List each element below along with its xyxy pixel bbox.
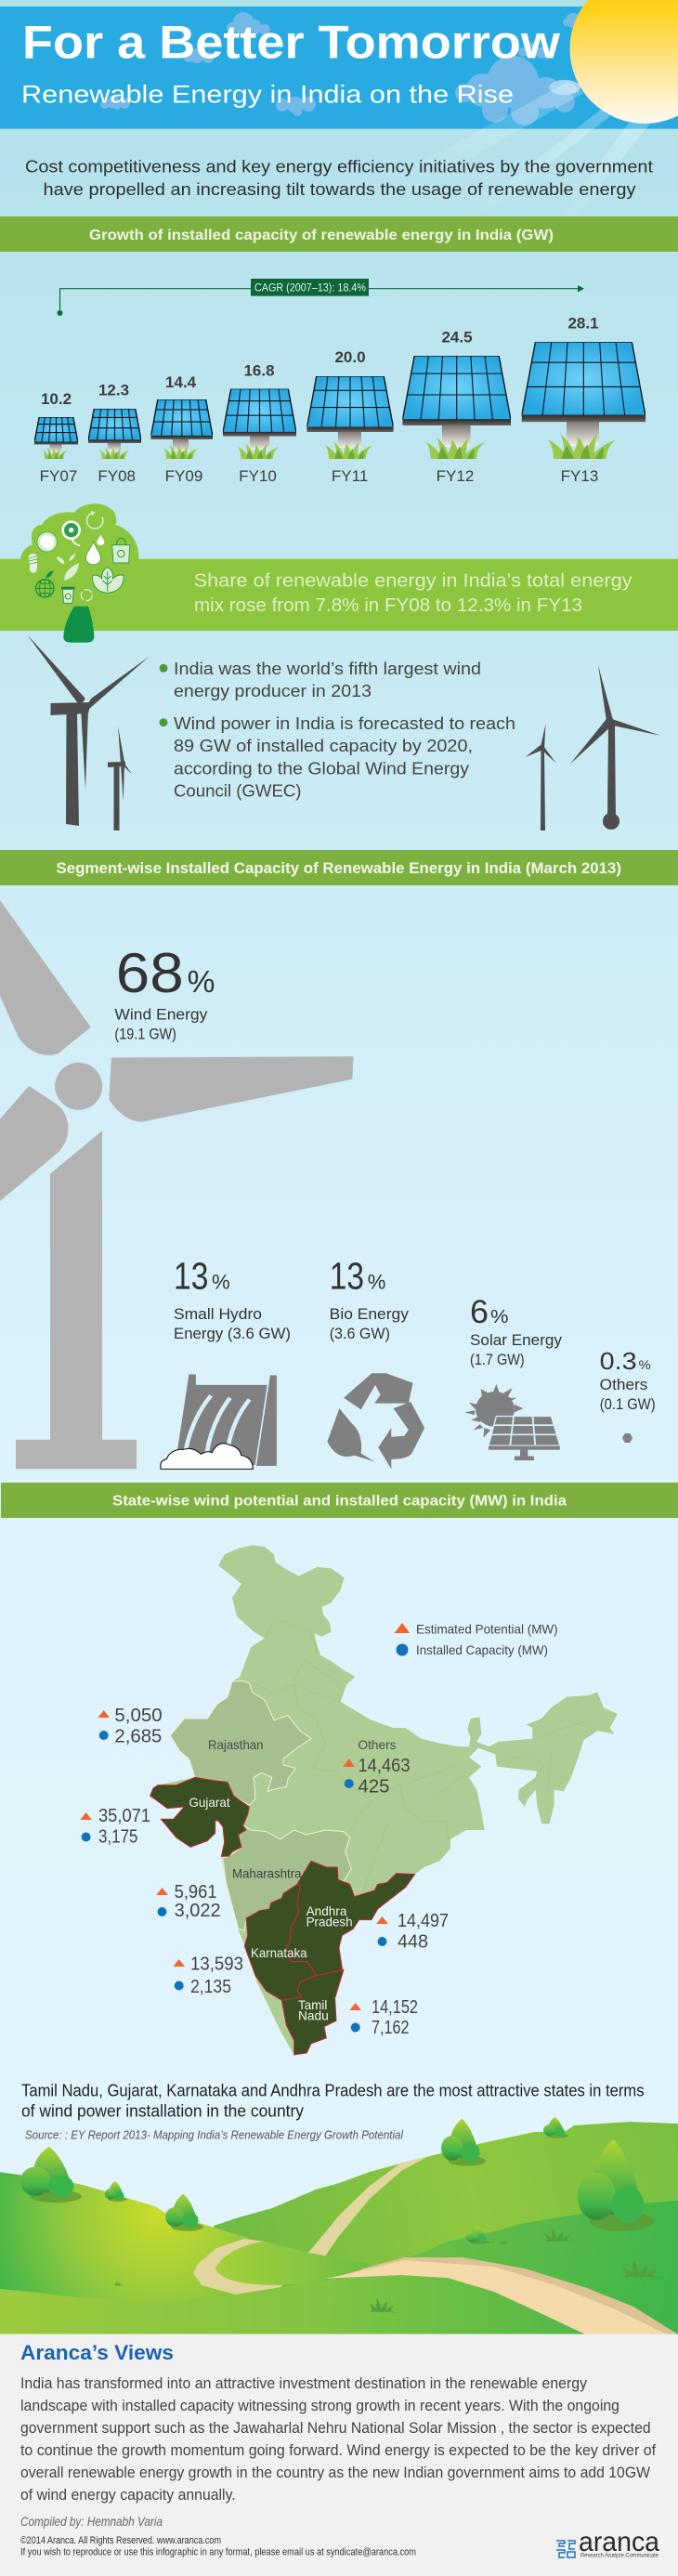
copyright: ©2014 Aranca. All Rights Reserved. www.aranca.com xyxy=(20,2535,221,2546)
FY10: FY10 xyxy=(239,467,277,485)
header banner xyxy=(0,0,678,216)
Others values: 425 xyxy=(359,1776,390,1797)
views body: India has transformed into an attractive investment destination in the renewable energy xyxy=(20,2375,588,2392)
icon: others dot xyxy=(622,1433,632,1443)
CAGR arrow xyxy=(58,279,584,316)
views body: of wind energy capacity annually. xyxy=(20,2487,236,2504)
Gujarat values: 3,175 xyxy=(98,1827,137,1848)
copyright: If you wish to reproduce or use this infographic in any format, please email us at syndicate@aranca.com xyxy=(20,2546,416,2557)
bushes xyxy=(20,2117,654,2244)
icon: solar panel and sun xyxy=(464,1384,560,1460)
Andhra Pradesh values: 14,497 xyxy=(398,1911,449,1931)
intro text: Cost competitiveness and key energy efficiency initiatives by the government xyxy=(25,158,653,177)
FY07: FY07 xyxy=(40,467,77,485)
section bar: state-wise wind: State-wise wind potential and installed capacity (MW) in India xyxy=(112,1493,567,1509)
wind facts: Wind power in India is forecasted to reach xyxy=(174,713,515,733)
wind facts: India was the world’s fifth largest wind xyxy=(174,659,481,678)
stat: bio energy xyxy=(330,1255,409,1342)
views body xyxy=(20,2375,656,2504)
FY11: FY11 xyxy=(332,467,368,485)
section bar: growth of capacity: Growth of installed capacity of renewable energy in India (GW) xyxy=(89,228,554,243)
views heading: Aranca’s Views xyxy=(20,2341,174,2364)
stat: small hydro xyxy=(174,1255,291,1342)
Tamil Nadu values: 7,162 xyxy=(372,2018,409,2038)
share banner: mix rose from 7.8% in FY08 to 12.3% in FY13 xyxy=(194,595,582,616)
stat: solar energy: Solar Energy xyxy=(470,1331,562,1349)
icon: green energy tree xyxy=(20,503,138,643)
stat: others: 0.3 xyxy=(600,1347,637,1375)
clouds xyxy=(100,12,580,125)
section bar: growth of capacity xyxy=(0,216,678,252)
Andhra Pradesh values: 448 xyxy=(398,1932,428,1953)
stat: wind energy: Wind Energy xyxy=(114,1005,208,1023)
stat: small hydro: Energy (3.6 GW) xyxy=(174,1325,291,1342)
Karnataka values: 2,135 xyxy=(190,1977,231,1997)
map: Rajasthan xyxy=(170,1680,311,1805)
compiled by: Compiled by: Hemnabh Varia xyxy=(20,2514,163,2529)
landscape illustration xyxy=(0,2117,678,2334)
stat: others: Others xyxy=(600,1376,647,1393)
copyright xyxy=(20,2535,416,2557)
stat: small hydro: 13 xyxy=(174,1255,208,1298)
Rajasthan values xyxy=(98,1706,163,1746)
stat: bio energy: Bio Energy xyxy=(330,1305,409,1323)
stat: others: % xyxy=(639,1357,651,1372)
map legend: Installed Capacity (MW) xyxy=(416,1642,548,1657)
map takeaway text xyxy=(21,2082,645,2120)
section bar: segment-wise capacity xyxy=(0,850,678,885)
map: Andhra Pradesh xyxy=(286,1861,415,1976)
Aranca's views panel xyxy=(0,2334,678,2576)
Others values xyxy=(343,1756,411,1797)
wind facts: according to the Global Wind Energy xyxy=(174,758,470,778)
stat: solar energy: 6 xyxy=(470,1294,489,1330)
map state labels: Maharashtra xyxy=(232,1866,302,1881)
stat: others: (0.1 GW) xyxy=(600,1395,656,1413)
map of India xyxy=(150,1545,618,2055)
FY08: FY08 xyxy=(98,467,136,485)
map: Maharashtra xyxy=(223,1825,351,1930)
aranca logo: aranca xyxy=(579,2527,659,2557)
map: Karnataka xyxy=(244,1884,316,2000)
Gujarat values xyxy=(80,1806,150,1848)
map: Gujarat xyxy=(150,1777,249,1856)
upper road xyxy=(308,2157,427,2256)
icon: hydro dam xyxy=(161,1374,277,1469)
map state labels xyxy=(189,1737,396,2023)
intro text: have propelled an increasing tilt towards the usage of renewable energy xyxy=(43,180,635,199)
Rajasthan values: 2,685 xyxy=(114,1726,162,1746)
icon: recycle leaf xyxy=(327,1373,424,1469)
wind turbines right xyxy=(526,665,660,830)
Tamil Nadu values xyxy=(349,1997,418,2038)
stat: solar energy: % xyxy=(490,1307,509,1327)
FY08 xyxy=(88,382,141,485)
wind turbines left xyxy=(27,634,150,830)
FY07 xyxy=(34,390,78,485)
Andhra Pradesh values xyxy=(376,1911,449,1953)
Others values: 14,463 xyxy=(359,1756,411,1776)
sun rays xyxy=(409,81,650,216)
FY09 xyxy=(150,373,213,485)
tree icons xyxy=(29,511,130,603)
map: India outline xyxy=(150,1545,618,2055)
stat: bio energy: 13 xyxy=(330,1255,364,1298)
small turbine xyxy=(108,726,132,830)
bullet xyxy=(160,664,167,673)
FY10 xyxy=(223,362,296,485)
map takeaway text: Tamil Nadu, Gujarat, Karnataka and Andhra Pradesh are the most attractive states in terms xyxy=(21,2082,645,2100)
views body: government support such as the Jawaharlal Nehru National Solar Mission , the sector is expected xyxy=(20,2420,651,2437)
big turbine xyxy=(27,634,150,826)
stat: small hydro: % xyxy=(212,1271,230,1294)
sun xyxy=(570,0,678,124)
Rajasthan values: 5,050 xyxy=(114,1706,163,1726)
source note: Source: : EY Report 2013- Mapping India’s Renewable Energy Growth Potential xyxy=(25,2128,404,2142)
wind facts: 89 GW of installed capacity by 2020, xyxy=(174,736,473,755)
map state labels: Others xyxy=(359,1737,396,1752)
map legend xyxy=(395,1621,558,1657)
aranca logo: Research.Analyze.Communicate xyxy=(580,2553,658,2558)
share banner xyxy=(0,559,678,631)
Maharashtra values: 5,961 xyxy=(175,1882,217,1903)
bar chart: solar panels xyxy=(34,315,645,485)
right mid hill xyxy=(372,2201,678,2334)
Maharashtra values xyxy=(156,1882,221,1921)
FY12: FY12 xyxy=(437,467,474,485)
FY12: 24.5 xyxy=(441,329,473,347)
back hill xyxy=(214,2122,678,2334)
FY12 xyxy=(402,329,511,485)
map state labels: Pradesh xyxy=(306,1914,353,1929)
map state labels: Gujarat xyxy=(189,1795,230,1810)
stat: bio energy: % xyxy=(368,1271,385,1294)
FY09: 14.4 xyxy=(165,373,197,391)
share banner: Share of renewable energy in India’s total energy xyxy=(194,570,632,592)
section bar: state-wise wind xyxy=(1,1483,678,1518)
wind facts: Council (GWEC) xyxy=(174,780,301,800)
stat: wind energy: 68 xyxy=(116,942,184,1004)
large grey wind turbine xyxy=(0,900,353,1469)
FY13: 28.1 xyxy=(567,315,599,333)
Gujarat values: 35,071 xyxy=(98,1806,150,1826)
map state labels: Andhra xyxy=(306,1903,347,1918)
subtitle: Renewable Energy in India on the Rise xyxy=(21,81,514,109)
views body: to continue the growth momentum going forward. Wind energy is expected to be the key driver of xyxy=(20,2442,656,2459)
grass tufts xyxy=(114,2229,662,2312)
Tamil Nadu values: 14,152 xyxy=(372,1997,418,2018)
FY09: FY09 xyxy=(165,467,202,485)
map data values xyxy=(80,1706,449,2038)
main road xyxy=(325,2257,678,2334)
stat: others xyxy=(600,1347,656,1413)
title: For a Better Tomorrow xyxy=(22,17,560,69)
FY11 xyxy=(306,348,394,485)
wind facts: energy producer in 2013 xyxy=(174,681,372,700)
FY07: 10.2 xyxy=(41,390,72,408)
stat: wind energy: (19.1 GW) xyxy=(114,1025,176,1042)
views body: landscape with installed capacity witnessing strong growth in recent years. With the ongoing xyxy=(20,2398,619,2414)
map state labels: Rajasthan xyxy=(208,1737,264,1752)
Karnataka values: 13,593 xyxy=(190,1954,243,1974)
stat: wind energy: % xyxy=(188,964,215,999)
stat: small hydro: Small Hydro xyxy=(174,1305,262,1323)
section bar: segment-wise capacity: Segment-wise Installed Capacity of Renewable Energy in India (March 2013) xyxy=(56,859,621,877)
Maharashtra values: 3,022 xyxy=(175,1901,221,1921)
bullet xyxy=(160,718,167,726)
inner hill xyxy=(215,2242,373,2285)
map state labels: Karnataka xyxy=(251,1945,307,1960)
map state labels: Tamil xyxy=(298,1997,327,2012)
map state labels: Nadu xyxy=(298,2008,329,2023)
stat: solar energy: (1.7 GW) xyxy=(470,1351,525,1368)
FY13: FY13 xyxy=(561,467,598,485)
big turbine xyxy=(570,665,660,830)
FY13 xyxy=(522,315,645,485)
wind facts xyxy=(160,659,515,800)
FY11: 20.0 xyxy=(334,348,366,366)
FY08: 12.3 xyxy=(98,382,129,399)
foreground hill xyxy=(0,2275,585,2334)
map legend: Estimated Potential (MW) xyxy=(416,1621,558,1636)
stat: solar energy xyxy=(470,1294,562,1368)
small turbine xyxy=(526,724,556,830)
views body: overall renewable energy growth in the country as the new Indian government aims to add 10GW xyxy=(20,2465,650,2481)
S road xyxy=(193,2239,297,2295)
FY10: 16.8 xyxy=(243,362,275,380)
intro text xyxy=(25,158,653,199)
stat: bio energy: (3.6 GW) xyxy=(330,1325,390,1342)
map takeaway text: of wind power installation in the country xyxy=(21,2101,304,2120)
stat: wind energy xyxy=(114,942,215,1042)
CAGR arrow: CAGR (2007–13): 18.4% xyxy=(254,282,366,294)
Karnataka values xyxy=(173,1954,243,1997)
left hill xyxy=(0,2172,373,2304)
map: Tamil Nadu xyxy=(281,1969,344,2055)
